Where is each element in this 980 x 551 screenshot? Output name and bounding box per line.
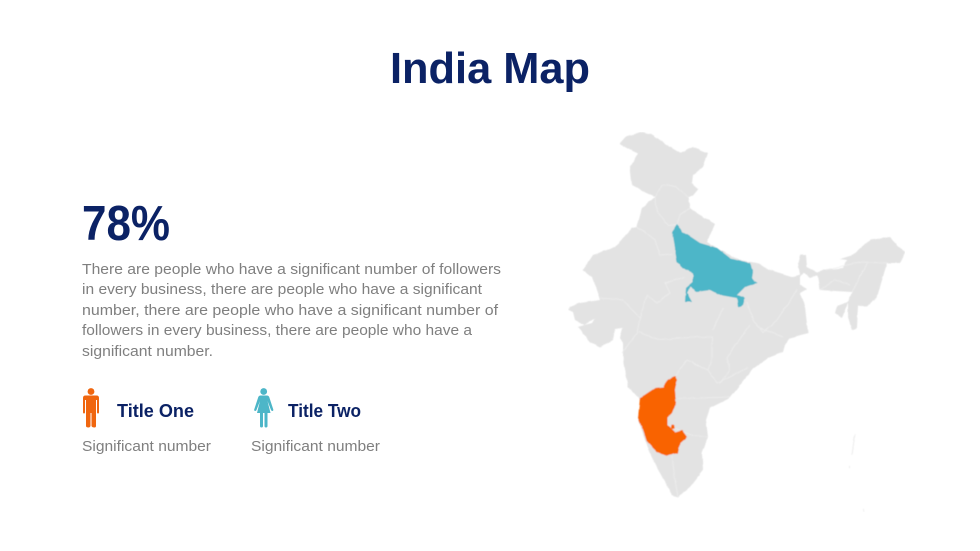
- icon: woman: [254, 388, 273, 428]
- heading: title one: Title One: [117, 401, 194, 421]
- highlighted state: Karnataka: [638, 376, 687, 456]
- highlighted state: Uttar Pradesh: [672, 224, 757, 307]
- stat block: title one: [82, 388, 211, 455]
- islands: Andaman and Nicobar: [850, 434, 864, 512]
- statistic: 78%: 78%: [82, 197, 170, 251]
- map: India: [568, 132, 905, 512]
- icon: man: [83, 388, 99, 428]
- stat block: title two: [251, 388, 380, 455]
- body paragraph: There are people who have a significant number of followers: [82, 261, 501, 278]
- body paragraph: followers in every business, there are people who have a: [82, 322, 473, 339]
- map base: India outline: [568, 132, 905, 497]
- body paragraph: [82, 261, 501, 360]
- body paragraph: significant number.: [82, 343, 213, 360]
- label: significant number: Significant number: [82, 438, 211, 455]
- label: significant number: Significant number: [251, 438, 380, 455]
- title: India Map: [390, 44, 590, 93]
- heading: title two: Title Two: [288, 401, 361, 421]
- body paragraph: in every business, there are people who have a significant: [82, 281, 483, 298]
- map: state borders: [600, 185, 887, 497]
- body paragraph: number, there are people who have a significant number of: [82, 302, 499, 319]
